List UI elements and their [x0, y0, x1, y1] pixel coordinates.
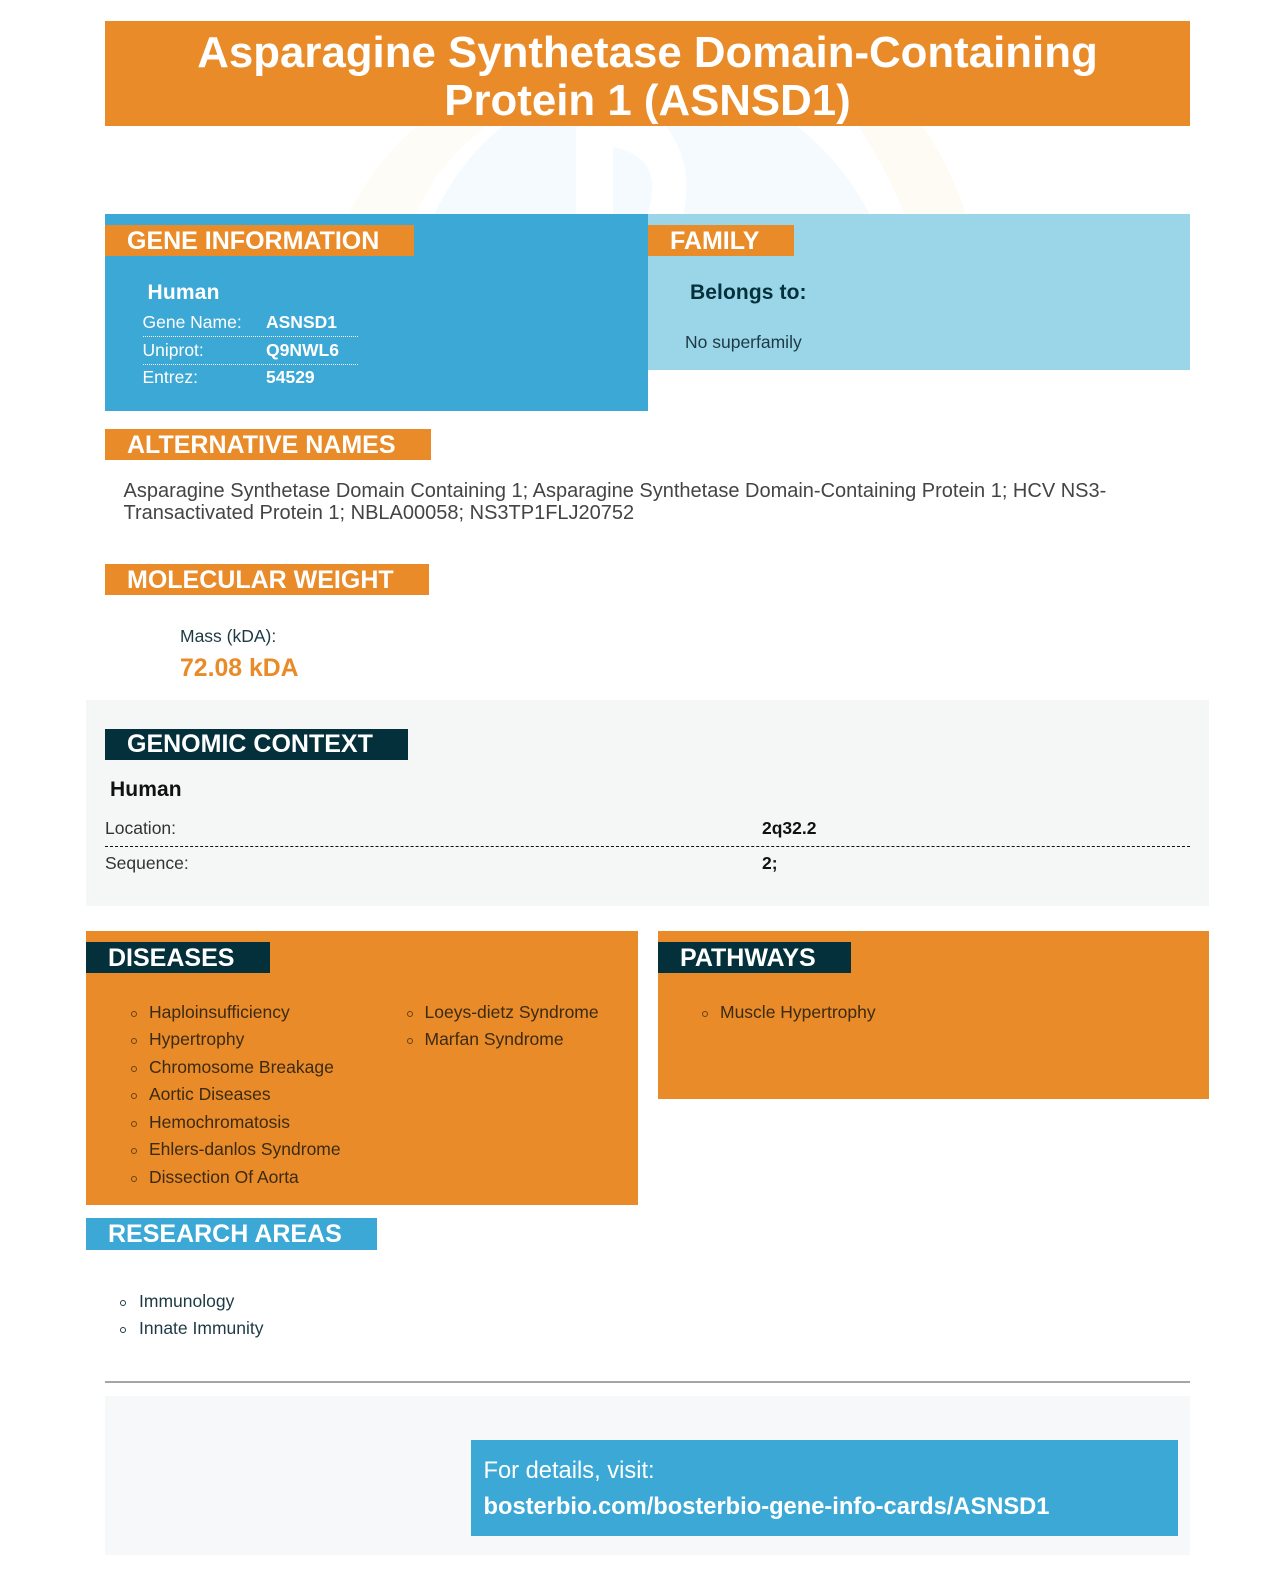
title banner	[105, 21, 1190, 126]
sequence row	[105, 853, 778, 873]
disease list left column: Hemochromatosis	[149, 1112, 290, 1132]
gene name row: Gene Name:	[142, 312, 242, 332]
entrez row: Entrez:	[142, 367, 198, 387]
pathway item: Muscle Hypertrophy	[720, 1002, 876, 1022]
heading: diseases	[86, 942, 270, 973]
callout url: bosterbio.com/bosterbio-gene-info-cards/ASNSD1	[484, 1494, 1049, 1520]
disease list left column	[131, 1002, 341, 1187]
heading: alternative names: ALTERNATIVE NAMES	[127, 431, 396, 459]
uniprot row: Q9NWL6	[266, 340, 339, 360]
panel: footer	[105, 1396, 1190, 1555]
gene name row: ASNSD1	[266, 312, 337, 332]
uniprot row	[142, 339, 358, 365]
disease list left column: Hypertrophy	[149, 1029, 244, 1049]
location row: 2q32.2	[762, 818, 816, 838]
title banner: Asparagine Synthetase Domain-Containing	[197, 28, 1098, 76]
disease list left column: Aortic Diseases	[149, 1084, 271, 1104]
callout: details link	[471, 1440, 1178, 1536]
panel: genomic context	[86, 700, 1209, 906]
species label: Human	[110, 778, 182, 801]
list item: Haploinsufficiency	[149, 1002, 290, 1022]
heading: genomic context: GENOMIC CONTEXT	[127, 730, 373, 758]
entrez row	[142, 367, 315, 387]
research areas list	[120, 1291, 264, 1338]
heading: pathways	[658, 942, 851, 973]
sequence row: Sequence:	[105, 853, 189, 873]
uniprot row: Uniprot:	[142, 340, 204, 360]
gene name row	[142, 311, 358, 337]
disease list left column: Chromosome Breakage	[149, 1057, 334, 1077]
family value: No superfamily	[685, 332, 802, 352]
location row	[105, 817, 1190, 847]
panel: pathways	[658, 931, 1209, 1099]
callout label: For details, visit:	[484, 1458, 655, 1484]
heading: pathways: PATHWAYS	[680, 944, 816, 972]
heading: gene information: GENE INFORMATION	[127, 227, 379, 255]
entrez row: 54529	[266, 367, 315, 387]
disease list left column: Ehlers-danlos Syndrome	[149, 1139, 341, 1159]
panel: family	[648, 214, 1190, 370]
background watermark logo	[349, 126, 966, 214]
panel: diseases	[86, 931, 638, 1205]
species label: Human	[148, 281, 220, 304]
panel: gene information	[105, 214, 648, 411]
belongs to label: Belongs to:	[690, 281, 807, 304]
title banner: Protein 1 (ASNSD1)	[444, 76, 851, 124]
research areas list: Innate Immunity	[139, 1318, 264, 1338]
disease list right column: Marfan Syndrome	[424, 1029, 564, 1049]
heading: research areas: RESEARCH AREAS	[108, 1220, 342, 1248]
mass value: 72.08 kDA	[180, 655, 299, 682]
heading: family: FAMILY	[670, 227, 759, 255]
disease list left column: Dissection Of Aorta	[149, 1167, 299, 1187]
heading: molecular weight: MOLECULAR WEIGHT	[127, 566, 394, 594]
heading: family	[648, 225, 794, 256]
list item: Loeys-dietz Syndrome	[424, 1002, 599, 1022]
alternative names text	[124, 480, 1106, 524]
list item: Immunology	[139, 1291, 234, 1311]
sequence row: 2;	[762, 853, 778, 873]
heading: diseases: DISEASES	[108, 944, 234, 972]
location row: Location:	[105, 818, 176, 838]
alternative names text: Asparagine Synthetase Domain Containing 1; Asparagine Synthetase Domain-Containing Protein 1; HCV NS3-	[124, 480, 1106, 502]
alternative names text: Transactivated Protein 1; NBLA00058; NS3TP1FLJ20752	[124, 502, 634, 524]
disease list right column	[407, 1002, 599, 1049]
mass label: Mass (kDA):	[180, 626, 276, 646]
